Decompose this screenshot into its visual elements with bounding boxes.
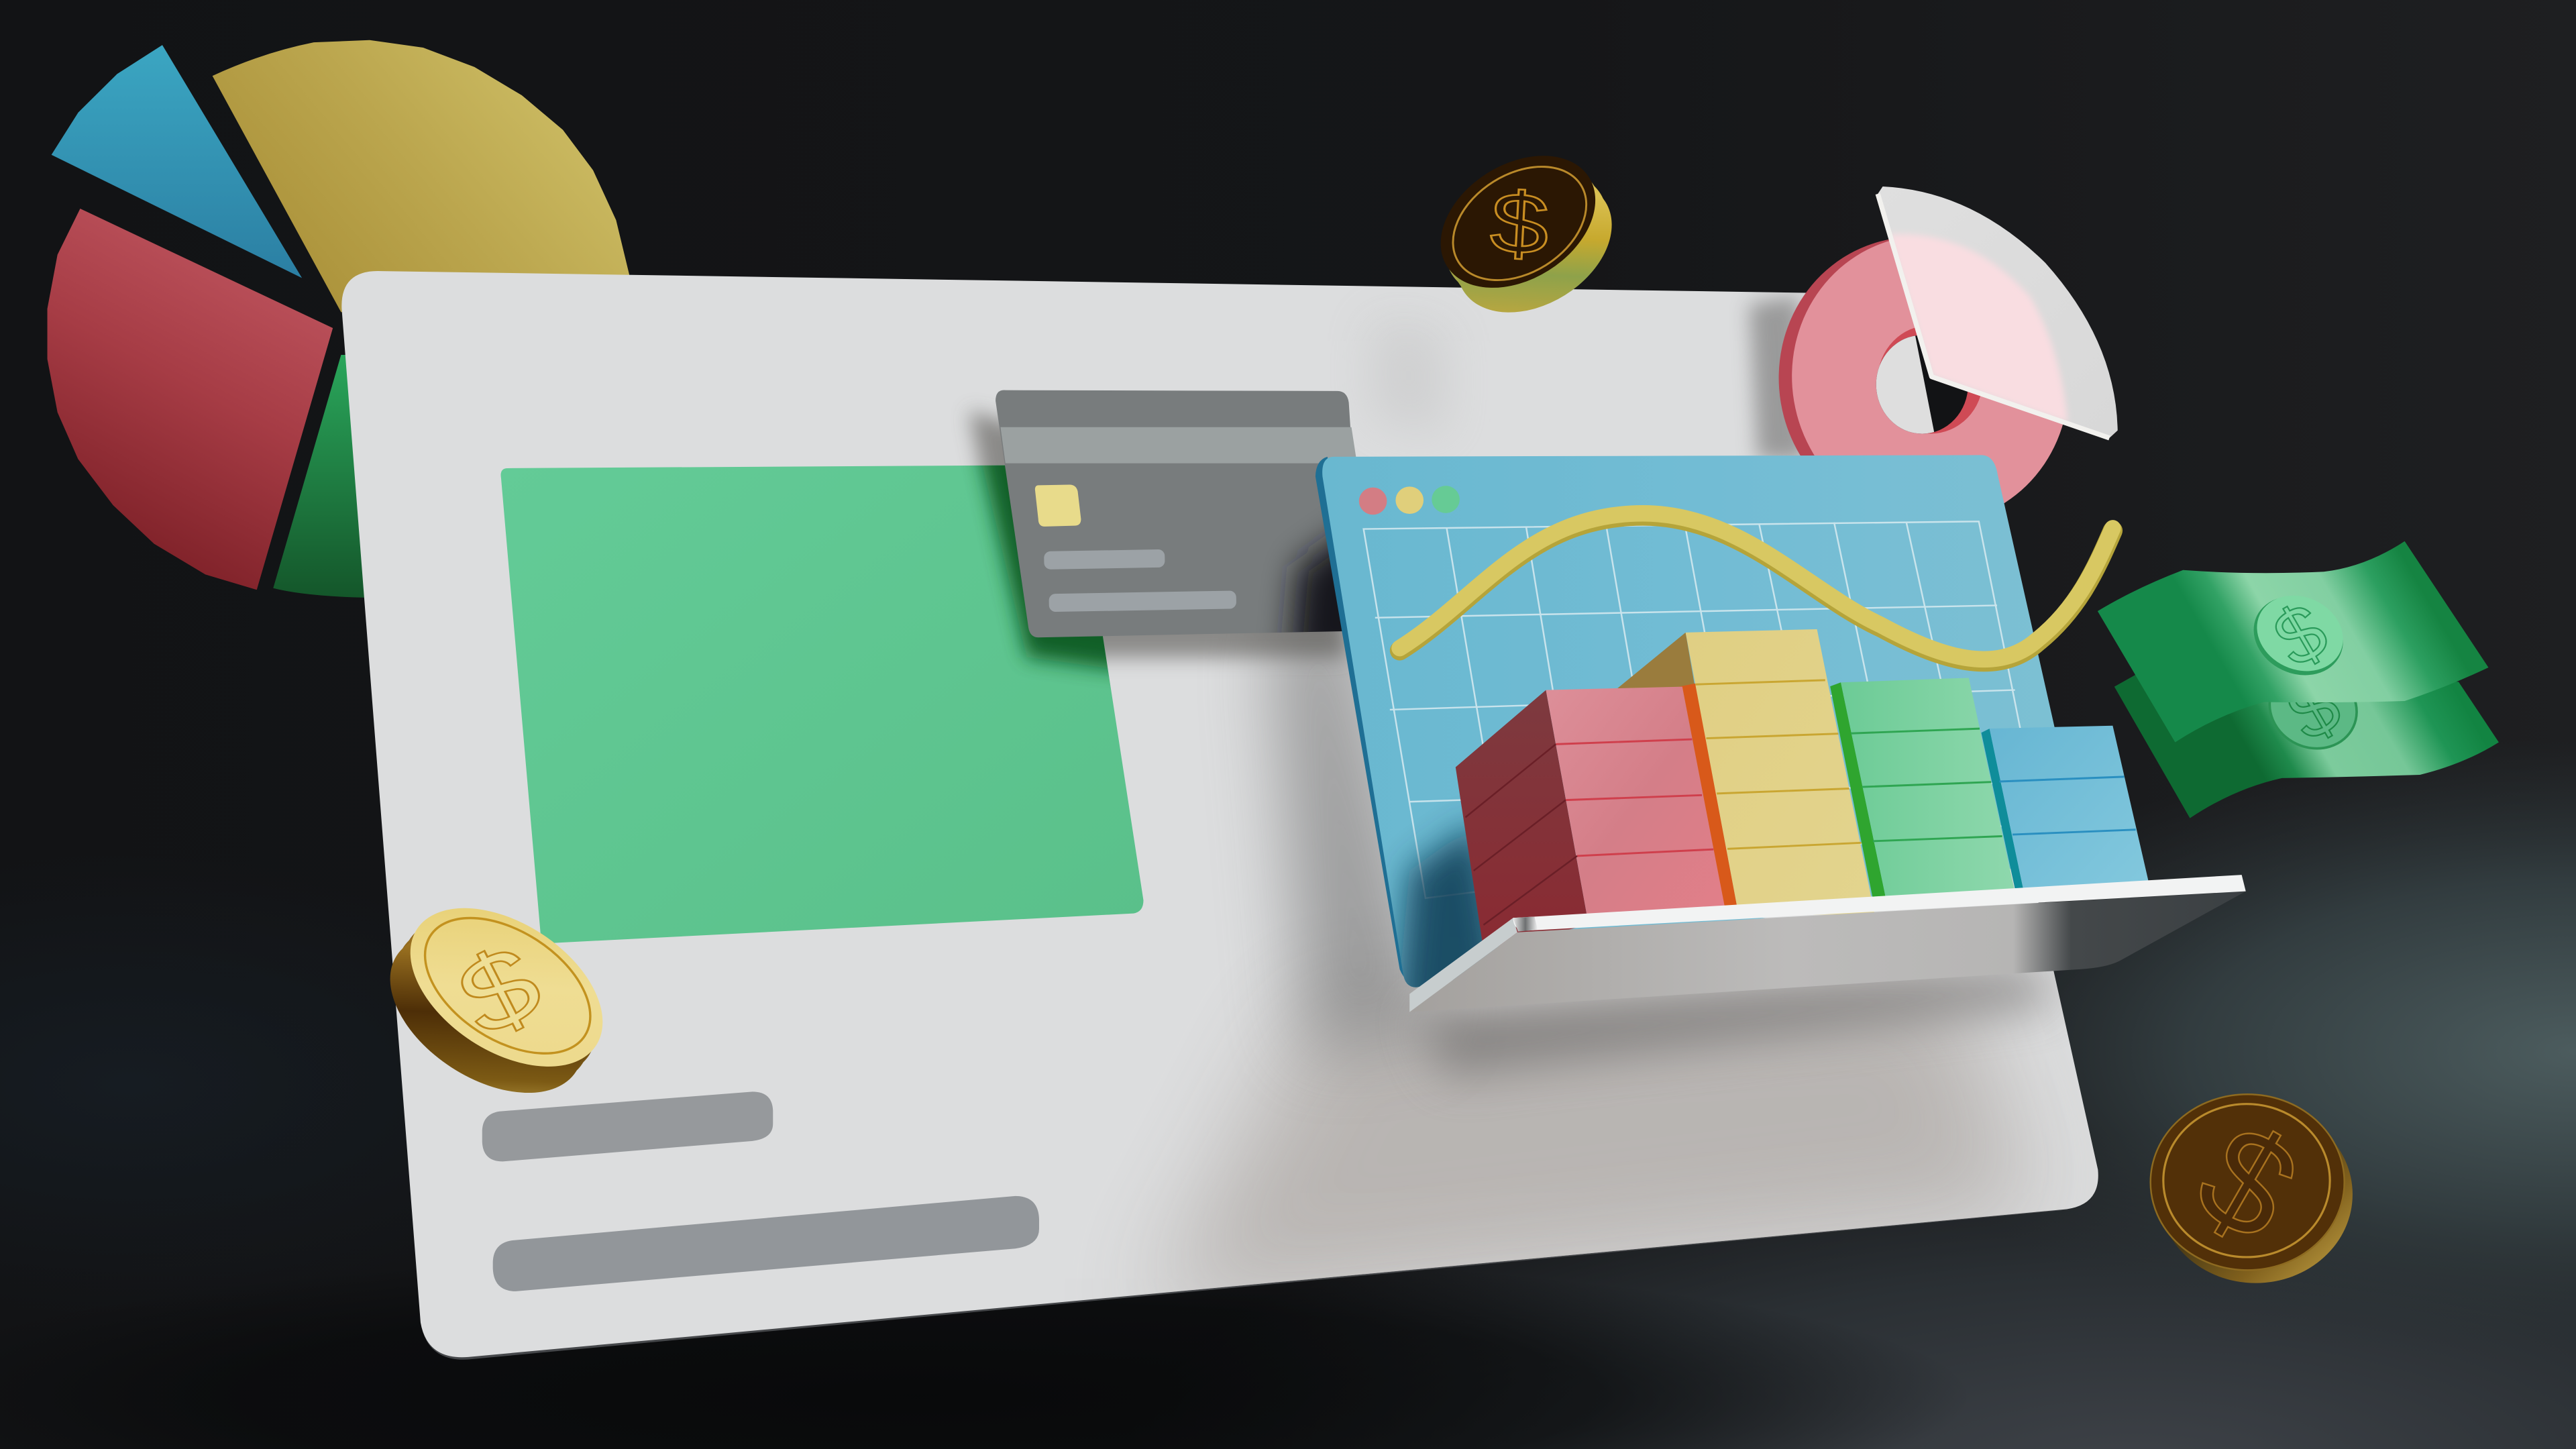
panel face bbox=[341, 271, 2098, 1357]
window back bbox=[1322, 455, 2083, 987]
bar: red bbox=[1456, 687, 1727, 950]
dollar glyph: $ bbox=[2259, 586, 2341, 684]
pie slice: red bbox=[48, 209, 333, 590]
main panel bbox=[341, 271, 2098, 1360]
dollar glyph: $ bbox=[1488, 174, 1551, 273]
chart window bbox=[1316, 455, 2083, 1018]
credit card shadow bbox=[969, 411, 1347, 657]
front bill medallion bbox=[2241, 582, 2356, 690]
bar chart bbox=[1456, 629, 2151, 950]
grey bar: long bbox=[493, 1196, 1039, 1291]
pie slice: blue bbox=[52, 45, 302, 278]
coin: left bbox=[362, 875, 631, 1126]
donut ring bbox=[1760, 204, 2101, 555]
bar: yellow bbox=[1617, 629, 1874, 917]
coin face bbox=[1417, 129, 1619, 315]
back bill medallion bbox=[2256, 653, 2370, 763]
bill: front bbox=[2098, 541, 2488, 742]
donut side wall bbox=[1746, 206, 2088, 557]
chart grid bbox=[1364, 521, 2039, 898]
coin face bbox=[2151, 1094, 2345, 1270]
coin face bbox=[382, 875, 631, 1099]
donut chart bbox=[1779, 186, 2118, 503]
card line: long bbox=[1049, 590, 1236, 612]
coin: top bbox=[1417, 129, 1636, 339]
credit card bbox=[996, 390, 1397, 665]
donut hole bbox=[1876, 335, 1968, 434]
line chart: yellow curve bbox=[1400, 513, 2112, 662]
shelf top strip bbox=[1513, 875, 2246, 930]
back bill medallion: $ bbox=[2273, 659, 2355, 758]
donut hole wall bbox=[1878, 325, 1983, 434]
window dots bbox=[1359, 486, 1460, 515]
shelf face bbox=[1409, 892, 2246, 1012]
card line: short bbox=[1044, 549, 1165, 570]
shelf chrome corner bbox=[1513, 917, 1538, 932]
coin rim bbox=[2163, 1104, 2330, 1257]
coin rim bbox=[1432, 144, 1607, 303]
panel seen through hole bbox=[1876, 335, 1935, 433]
window left edge bbox=[1316, 457, 1423, 987]
coin: bottom right bbox=[2151, 1092, 2353, 1283]
card stripe bbox=[1000, 427, 1357, 464]
grey bar: short bbox=[482, 1091, 773, 1161]
pie slice: green bbox=[273, 355, 394, 598]
coin edge bbox=[1421, 137, 1636, 339]
dollar glyph: $ bbox=[2173, 1092, 2323, 1273]
coin edge bbox=[2159, 1106, 2353, 1283]
bar shadow on window bbox=[1397, 821, 1511, 1018]
bill: back bbox=[2114, 665, 2499, 818]
pie chart bbox=[48, 40, 629, 598]
green card bbox=[501, 443, 1150, 943]
panel shading bbox=[1150, 296, 2053, 1314]
panel edge bbox=[421, 1209, 2074, 1360]
shelf bbox=[1409, 875, 2246, 1012]
dollar glyph: $ bbox=[440, 921, 559, 1060]
glass slice bbox=[1878, 186, 2118, 438]
bar: blue bbox=[1981, 726, 2151, 900]
bar: green bbox=[1830, 678, 2017, 907]
pie slice: yellow bbox=[213, 40, 629, 312]
shelf bevel bbox=[1409, 918, 1517, 1012]
coin rim bbox=[401, 890, 614, 1081]
card chip bbox=[1035, 484, 1081, 527]
coin edge bbox=[362, 885, 624, 1126]
cash bills bbox=[2098, 541, 2499, 818]
